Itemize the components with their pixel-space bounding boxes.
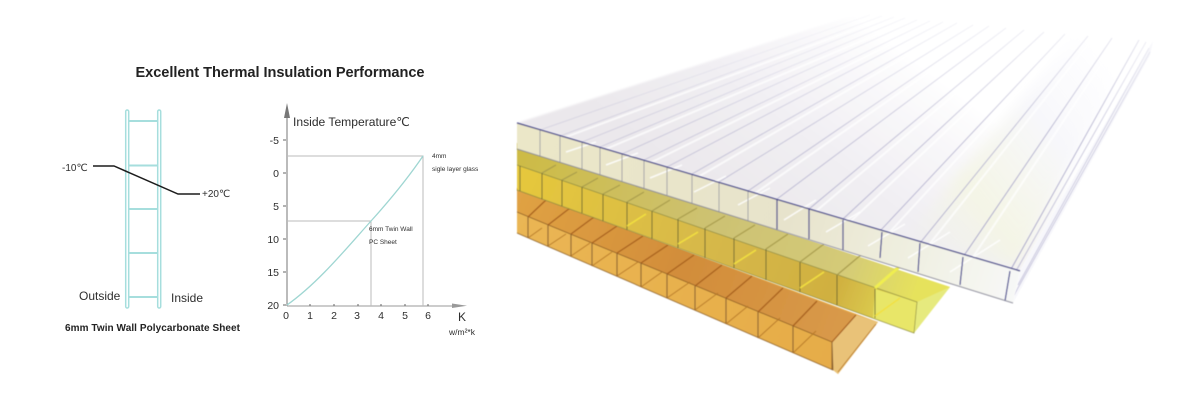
annotation: 4mm glass: 4mm [432, 153, 446, 160]
clear sheet bottom edge [517, 149, 1013, 303]
annotation: PC sheet: PC Sheet [369, 239, 397, 246]
label: inside: Inside [171, 291, 203, 305]
clear sheet top edge [517, 123, 1020, 271]
orange sheet [517, 188, 878, 374]
y axis labels: 10 [267, 234, 279, 246]
y axis labels [267, 135, 279, 312]
y axis labels: 15 [267, 267, 279, 279]
clear sheet channel highlights [566, 142, 1000, 272]
clear sheet top surface [517, 14, 1153, 271]
y axis labels: 0 [273, 168, 279, 180]
title: Excellent Thermal Insulation Performance [136, 65, 424, 81]
clear sheet front face [517, 123, 1020, 303]
clear sheet edge ribs [540, 130, 748, 221]
clear sheet surface ribs [540, 15, 1150, 295]
axis ticks [283, 140, 428, 306]
reference lines [287, 156, 423, 306]
clear sheet surface tint [905, 36, 1140, 268]
x axis labels: 0 [283, 310, 289, 322]
x axis labels: 1 [307, 310, 313, 322]
y axis labels: 5 [273, 201, 279, 213]
x axis labels: 3 [354, 310, 360, 322]
x axis labels: 2 [331, 310, 337, 322]
clear sheet surface highlights [566, 17, 1118, 260]
photo: stacked polycarbonate sheets [517, 14, 1153, 374]
diagram caption: 6mm Twin Wall Polycarbonate Sheet [65, 323, 241, 334]
chart: inside temperature vs K [267, 103, 479, 337]
annotation: single layer glass: sigle layer glass [432, 166, 479, 173]
y axis labels: -5 [270, 135, 279, 147]
x axis unit: K [458, 310, 466, 324]
curve [287, 156, 423, 305]
twin wall ladder [126, 110, 161, 308]
label: outside: Outside [79, 289, 121, 303]
label: inside temperature: +20℃ [202, 189, 230, 200]
x axis labels: 4 [378, 310, 384, 322]
y axis arrow [284, 103, 290, 306]
x axis labels: 6 [425, 310, 431, 322]
y axis labels: 20 [267, 300, 279, 312]
x axis unit detail: w/m²*k [448, 327, 476, 337]
temperature line [93, 166, 200, 194]
y axis title: Inside Temperature℃ [293, 115, 410, 129]
x axis arrow [287, 304, 467, 308]
yellow sheet [517, 143, 950, 333]
label: outside temperature: -10℃ [62, 163, 88, 174]
diagram: twin wall section [62, 110, 241, 334]
clear sheet right side [1013, 41, 1153, 303]
x axis labels: 5 [402, 310, 408, 322]
x axis labels [283, 310, 431, 322]
annotation: twin wall: 6mm Twin Wall [369, 226, 413, 233]
